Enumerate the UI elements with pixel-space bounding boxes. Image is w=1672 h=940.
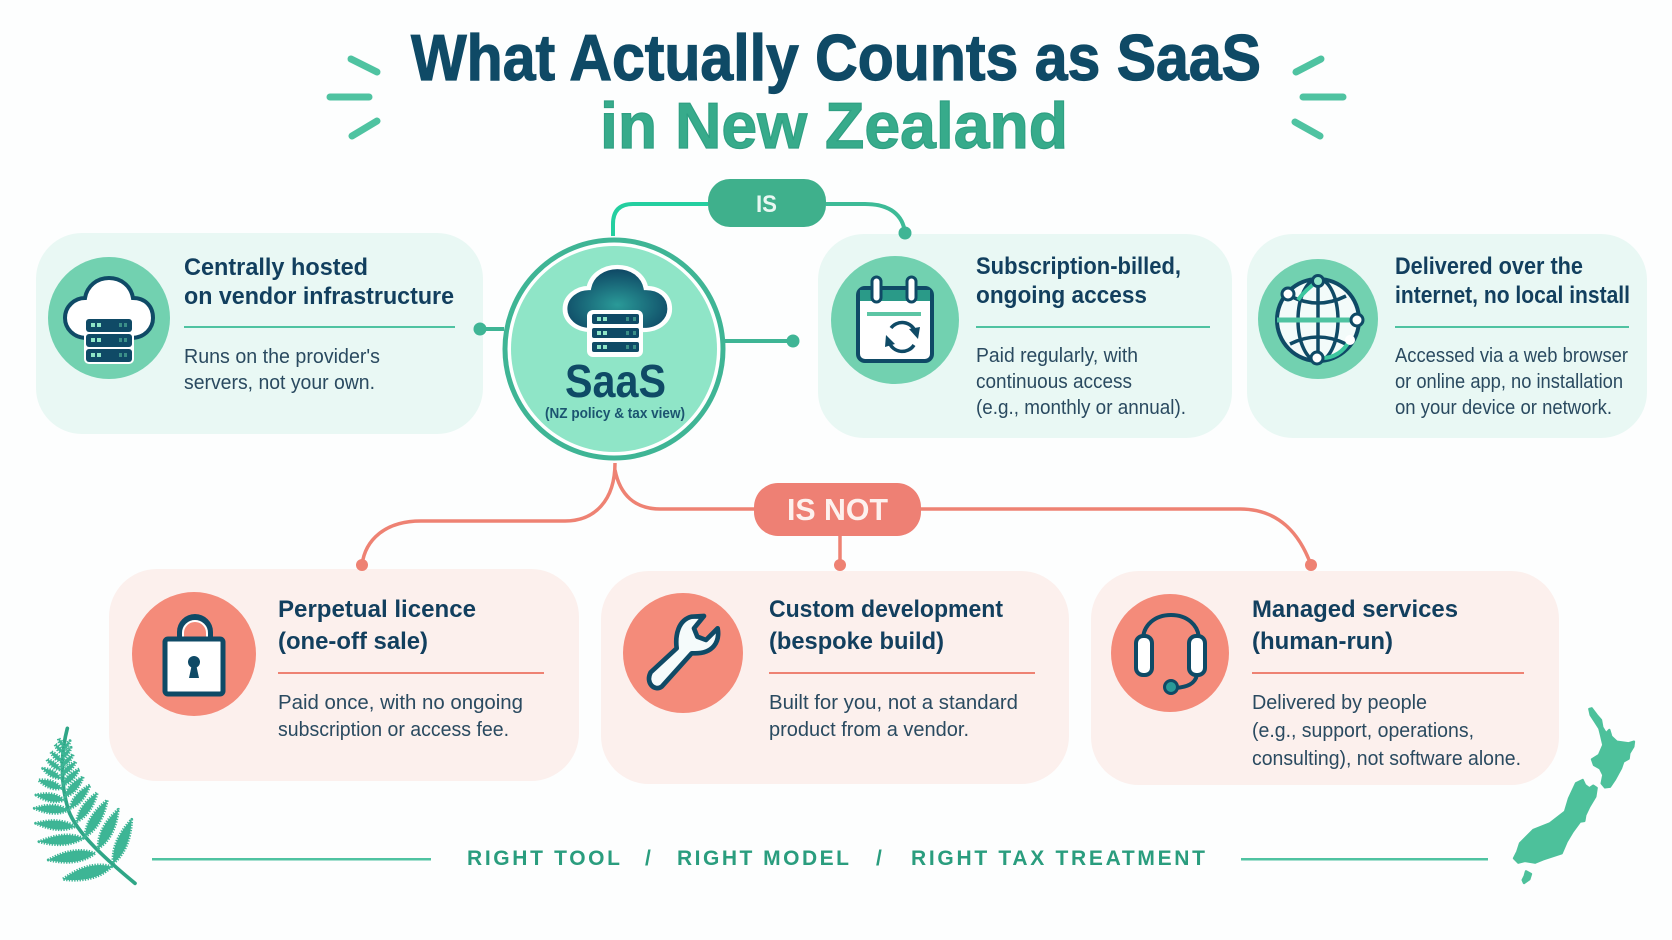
description [1252, 692, 1521, 770]
heading: on vendor infrastructure [184, 283, 454, 310]
description: Delivered by people [1252, 692, 1427, 714]
heading [1395, 253, 1630, 309]
description: (e.g., monthly or annual). [976, 397, 1186, 419]
heading [976, 253, 1181, 309]
description [184, 346, 380, 394]
badge: IS NOT: IS NOT [787, 492, 888, 527]
badge: IS: IS [756, 191, 777, 218]
heading: Delivered over the [1395, 253, 1583, 280]
title: in New Zealand [600, 89, 1068, 162]
description: subscription or access fee. [278, 719, 509, 741]
heading [278, 596, 476, 655]
footer tagline [152, 847, 1488, 870]
panel: managed services [1091, 571, 1559, 785]
panel: custom development [601, 571, 1069, 784]
connectors: IS NOT [356, 463, 1317, 571]
heading: (human-run) [1252, 628, 1393, 655]
description: Accessed via a web browser [1395, 345, 1628, 367]
heading: (bespoke build) [769, 628, 944, 655]
icon: wrench [623, 593, 743, 713]
icon: hub cloud with server [565, 267, 670, 357]
footer tagline: / [876, 847, 882, 870]
heading [1252, 596, 1458, 655]
central hub: SaaS [505, 240, 723, 458]
heading: Centrally hosted [184, 254, 368, 281]
title [411, 21, 1261, 162]
footer tagline: RIGHT TAX TREATMENT [911, 847, 1205, 870]
footer tagline: RIGHT MODEL [677, 847, 849, 870]
description: continuous access [976, 371, 1132, 393]
icon: headset [1111, 594, 1229, 712]
icon: cloud with server [48, 257, 170, 379]
icon: padlock [132, 592, 256, 716]
description: Paid once, with no ongoing [278, 692, 523, 714]
description: (e.g., support, operations, [1252, 720, 1474, 742]
icon: globe network [1258, 259, 1378, 379]
title accent dashes: left [330, 59, 377, 136]
description: product from a vendor. [769, 719, 969, 741]
description [1395, 345, 1628, 419]
description [976, 345, 1186, 419]
heading [184, 254, 454, 310]
heading: internet, no local install [1395, 282, 1630, 309]
description: servers, not your own. [184, 372, 375, 394]
heading: ongoing access [976, 282, 1147, 309]
description: consulting), not software alone. [1252, 748, 1521, 770]
description: Paid regularly, with [976, 345, 1138, 367]
description: Runs on the provider's [184, 346, 380, 368]
panel: centrally hosted [36, 233, 483, 434]
description: or online app, no installation [1395, 371, 1623, 393]
heading: (one-off sale) [278, 628, 428, 655]
icon: calendar with refresh [831, 256, 959, 384]
heading: Subscription-billed, [976, 253, 1181, 280]
description: on your device or network. [1395, 397, 1612, 419]
connectors: IS [474, 204, 912, 348]
icon: map of New Zealand [1514, 708, 1634, 883]
icon: silver fern [34, 728, 135, 883]
badge: IS NOT [754, 483, 921, 536]
hub label: SaaS [565, 355, 666, 407]
description [278, 692, 523, 741]
heading [769, 596, 1003, 655]
panel: subscription-billed [818, 234, 1232, 438]
heading: Managed services [1252, 596, 1458, 623]
title accent dashes: right [1295, 59, 1343, 136]
title: What Actually Counts as SaaS [411, 21, 1261, 94]
hub sublabel: (NZ policy & tax view) [545, 405, 685, 422]
description [769, 692, 1018, 741]
footer tagline: RIGHT TOOL [467, 847, 620, 870]
description: Built for you, not a standard [769, 692, 1018, 714]
panel: delivered over the internet [1247, 234, 1647, 438]
heading: Perpetual licence [278, 596, 476, 623]
footer tagline: / [645, 847, 651, 870]
panel: perpetual licence [109, 569, 579, 781]
heading: Custom development [769, 596, 1003, 623]
badge: IS [708, 179, 826, 227]
